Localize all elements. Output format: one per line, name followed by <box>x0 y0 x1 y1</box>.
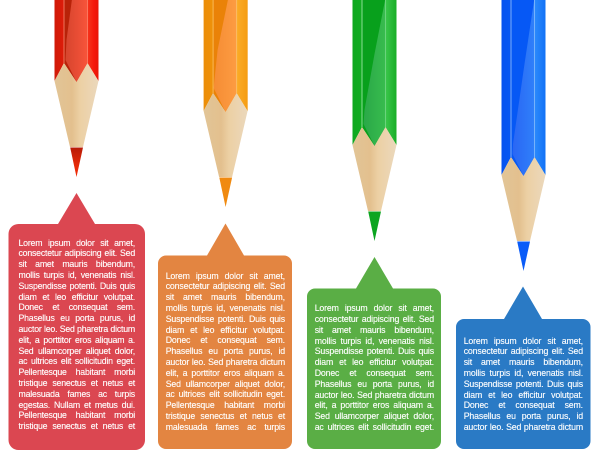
orange callout text: elit, a porttitor eros aliquam a. <box>166 368 285 378</box>
orange callout text: malesuada fames ac turpis <box>166 422 285 432</box>
red callout text: malesuada fames ac turpis <box>18 389 135 399</box>
pencil: green <box>352 0 396 241</box>
red callout text: Suspendisse potenti. Duis quis <box>18 281 135 291</box>
green callout text: sit amet mauris bibendum, <box>315 325 434 335</box>
red callout text <box>18 238 136 431</box>
green callout text: Sed ullamcorper aliquet dolor, <box>315 411 434 421</box>
green callout text: Suspendisse potenti. Duis quis <box>315 346 434 356</box>
orange callout text: mollis turpis id, venenatis nisl. <box>166 303 285 313</box>
blue callout text: Phasellus eu porta purus, id <box>464 411 583 421</box>
red callout text: sit amet mauris bibendum, <box>18 259 135 269</box>
green callout text <box>315 303 434 432</box>
red callout text: auctor leo. Sed pharetra dictum <box>18 324 135 334</box>
red callout text: mollis turpis id, venenatis nisl. <box>18 270 135 280</box>
green callout text: Donec et consequat sem. <box>315 368 434 378</box>
red callout text: tristique senectus et netus et <box>18 421 135 431</box>
red callout text: Lorem ipsum dolor sit amet, <box>18 238 135 248</box>
red callout text: egestas. Nullam et metus dui. <box>18 400 135 410</box>
orange callout text: Lorem ipsum dolor sit amet, <box>166 271 285 281</box>
blue callout text: Donec et consequat sem. <box>464 400 583 410</box>
orange callout text: diam et leo efficitur volutpat. <box>166 325 285 335</box>
red callout text: Donec et consequat sem. <box>18 302 135 312</box>
orange callout text: consectetur adipiscing elit. Sed <box>166 281 285 291</box>
orange callout text: sit amet mauris bibendum, <box>166 292 285 302</box>
blue callout text <box>464 336 583 432</box>
orange callout text: Pellentesque habitant morbi <box>166 400 285 410</box>
green callout text: auctor leo. Sed pharetra dictum <box>315 390 434 400</box>
blue callout text: Lorem ipsum dolor sit amet, <box>464 336 583 346</box>
pencil: blue <box>502 0 546 271</box>
blue callout text: Suspendisse potenti. Duis quis <box>464 379 583 389</box>
red callout text: Pellentesque habitant morbi <box>18 410 135 420</box>
red callout text: elit, a porttitor eros aliquam a. <box>18 335 135 345</box>
orange callout text <box>166 271 286 432</box>
red callout text: consectetur adipiscing elit. Sed <box>18 248 135 258</box>
pencil: red <box>54 0 98 177</box>
orange callout text: Phasellus eu porta purus, id <box>166 346 285 356</box>
green callout text: elit, a porttitor eros aliquam a. <box>315 400 434 410</box>
blue callout text: mollis turpis id, venenatis nisl. <box>464 368 583 378</box>
green callout text: consectetur adipiscing elit. Sed <box>315 314 434 324</box>
blue callout text: consectetur adipiscing elit. Sed <box>464 346 583 356</box>
blue callout text: sit amet mauris bibendum, <box>464 357 583 367</box>
orange callout text: auctor leo. Sed pharetra dictum <box>166 357 285 367</box>
red callout text: Pellentesque habitant morbi <box>18 367 135 377</box>
green callout text: ac ultrices elit sollicitudin eget. <box>315 422 434 432</box>
orange callout text: Suspendisse potenti. Duis quis <box>166 314 285 324</box>
orange callout text: ac ultrices elit sollicitudin eget. <box>166 389 285 399</box>
red callout text: Sed ullamcorper aliquet dolor, <box>18 346 135 356</box>
orange callout text: tristique senectus et netus et <box>166 411 285 421</box>
orange callout text: Donec et consequat sem. <box>166 335 285 345</box>
red callout text: Phasellus eu porta purus, id <box>18 313 135 323</box>
green callout text: mollis turpis id, venenatis nisl. <box>315 336 434 346</box>
red callout text: ac ultrices elit sollicitudin eget. <box>18 356 135 366</box>
blue callout text: diam et leo efficitur volutpat. <box>464 390 583 400</box>
orange callout text: Sed ullamcorper aliquet dolor, <box>166 379 285 389</box>
green callout text: Lorem ipsum dolor sit amet, <box>315 303 434 313</box>
red callout text: tristique senectus et netus et <box>18 378 135 388</box>
green callout text: Phasellus eu porta purus, id <box>315 379 434 389</box>
red callout text: diam et leo efficitur volutpat. <box>18 292 135 302</box>
blue callout text: auctor leo. Sed pharetra dictum <box>464 422 583 432</box>
green callout text: diam et leo efficitur volutpat. <box>315 357 434 367</box>
pencil: orange <box>204 0 248 207</box>
